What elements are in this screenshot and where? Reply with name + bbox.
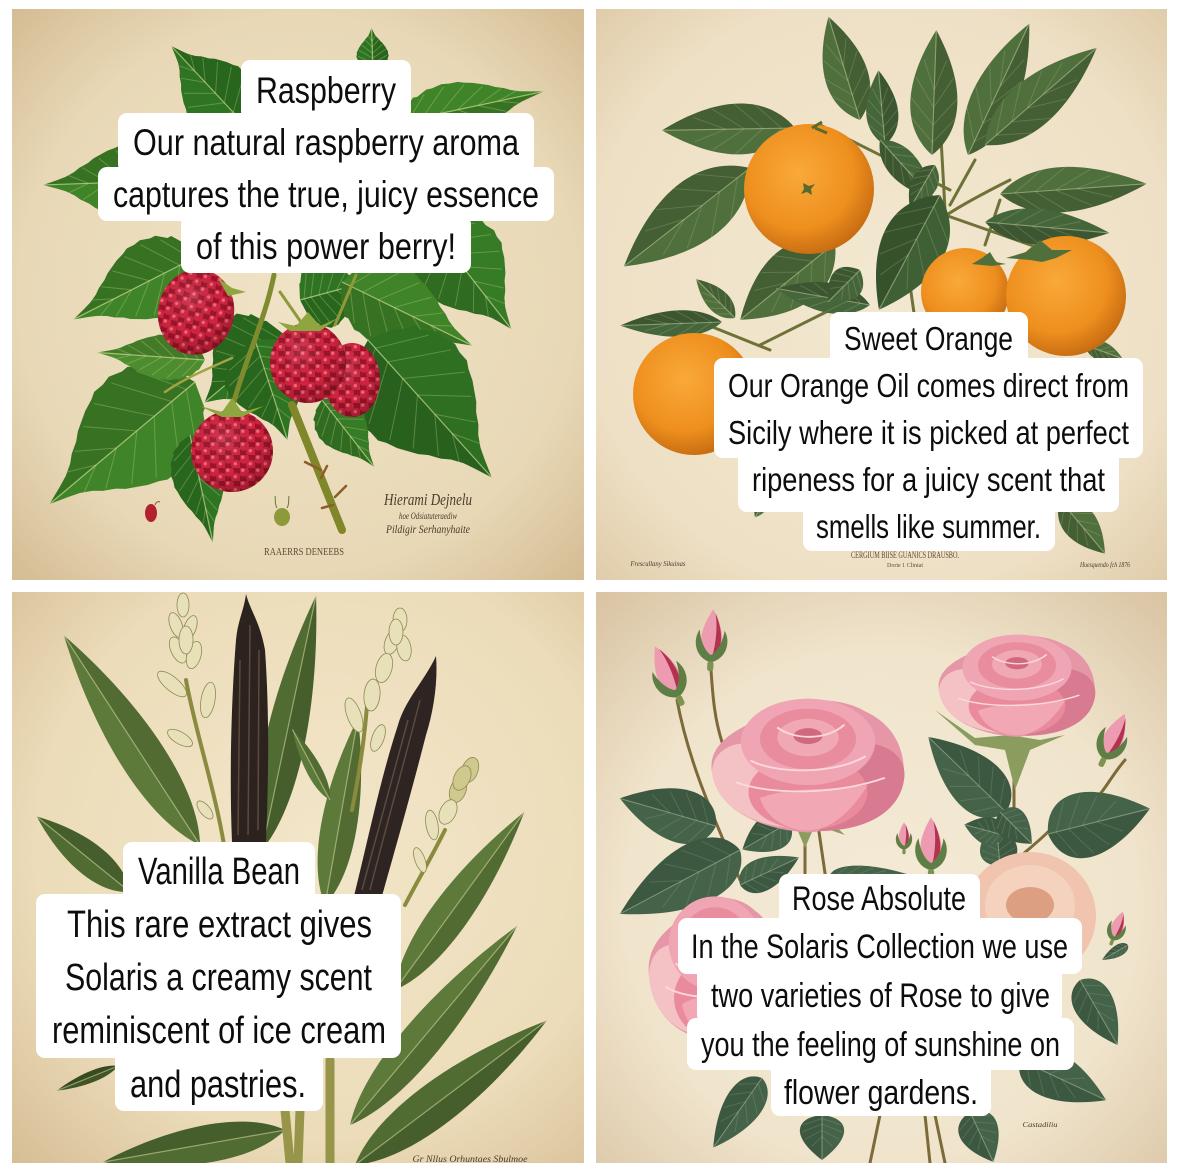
label: vanilla bean: Vanilla Bean [138,851,300,893]
botanical captions [264,490,472,558]
raspberry stems [165,275,356,530]
vanilla pods [231,594,437,896]
orange stems [695,120,1045,350]
label: raspberry: Raspberry [256,70,396,111]
botanical captions: Hierami Dejnelu [383,490,472,509]
raspberries [150,262,380,492]
rose buds [640,608,1138,948]
rose leaves [606,718,1158,1170]
plate captions [630,552,1130,568]
panel: sweet orange [596,9,1167,580]
label: rose absolute: two varieties of Rose to give [711,977,1050,1015]
botanical captions: RAAERRS DENEEBS [264,547,344,558]
label: sweet orange: smells like summer. [816,508,1041,545]
plate captions: Huesquendo fch 1876 [1079,561,1130,569]
plate signature: Castadiliu [1022,1121,1058,1129]
label: raspberry: captures the true, juicy essence [113,174,539,215]
label: vanilla bean: and pastries. [130,1064,306,1106]
label: rose absolute: you the feeling of sunshine on [701,1026,1060,1064]
label: vanilla bean: This rare extract gives [67,904,372,946]
plate captions: Dorie 1 Cliniat [887,563,923,569]
vanilla stems [186,680,445,1163]
plate captions: CERGIUM BIISE GUANICS DRAUSBO. [851,550,959,560]
botanical captions: Pildigir Serhanyhaite [385,522,471,536]
label: rose absolute: flower gardens. [784,1074,978,1112]
panel: raspberry [11,9,584,580]
label: vanilla bean: Solaris a creamy scent [65,957,372,999]
large roses [649,635,1096,1041]
orange leaves [605,10,1148,565]
label: sweet orange [714,312,1143,551]
label: vanilla bean [36,842,401,1111]
panel: rose absolute [596,592,1167,1170]
label: rose absolute: In the Solaris Collection we use [691,928,1068,966]
label: raspberry: of this power berry! [196,226,456,267]
label: vanilla bean: reminiscent of ice cream [52,1010,386,1052]
label: rose absolute: Rose Absolute [792,880,966,918]
vanilla flower spikes [154,593,482,874]
label: raspberry: Our natural raspberry aroma [133,122,519,163]
label: sweet orange: ripeness for a juicy scent that [752,461,1105,498]
rose stems [677,670,1125,1163]
label: rose absolute [678,874,1082,1116]
small fruit details [145,496,290,526]
label: sweet orange: Sweet Orange [844,320,1013,357]
oranges [633,122,1126,455]
vanilla leaves [27,592,560,1175]
plate captions: Frescullany Sikuinas [630,560,686,568]
botanical captions: hoe Odsiatuteraediw [399,511,457,521]
panel: vanilla bean [12,592,584,1175]
plate signature: Gr Nllus Orhuntaes Sbulmoe [412,1154,528,1164]
raspberry leaves [11,21,550,550]
label: raspberry [98,60,554,273]
